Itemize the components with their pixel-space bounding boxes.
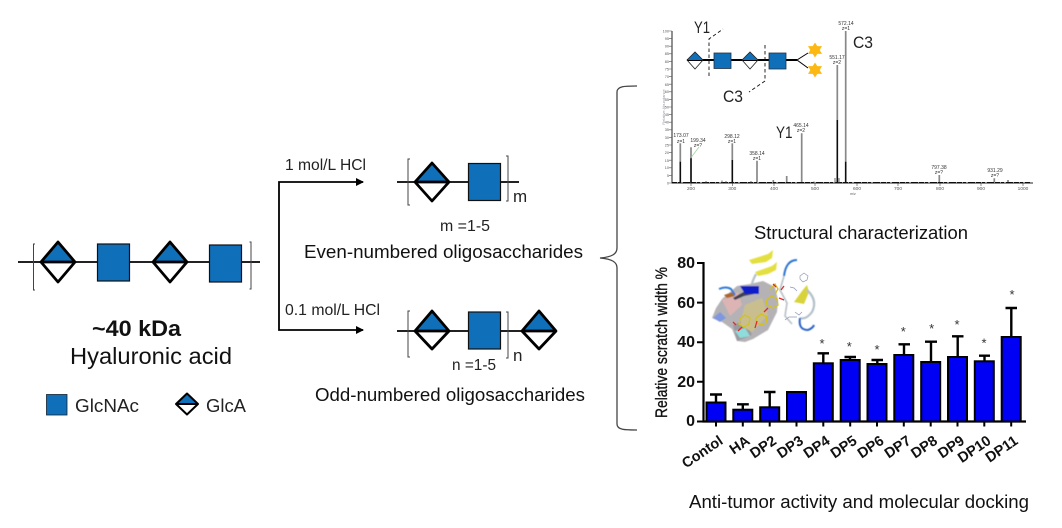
spectrum axes: 45 — [665, 113, 669, 117]
spectrum axes: 60 — [665, 90, 669, 94]
peak labels: z=2 — [797, 128, 805, 134]
peak labels: 551.17 — [829, 55, 845, 61]
x axis labels: Contol — [679, 433, 726, 472]
spectrum axes: 20 — [665, 151, 669, 155]
peak labels: z=1 — [728, 139, 736, 145]
spectrum axes: 50 — [665, 106, 669, 110]
peak labels: 298.12 — [724, 134, 740, 140]
x axis labels: HA — [727, 433, 754, 458]
spectrum axes: 10 — [665, 166, 669, 170]
branching reaction arrows — [279, 178, 364, 334]
y axis title: Relative scratch width % — [652, 267, 671, 418]
spectrum axes: 85 — [665, 52, 669, 56]
fragmentation glycan inset — [687, 29, 822, 92]
peak labels: 465.14 — [793, 123, 809, 129]
hyaluronic acid label: Hyaluronic acid — [70, 343, 232, 369]
spectrum axes: 75 — [665, 68, 669, 72]
fragment label: C3 peak: C3 — [853, 34, 873, 52]
fragment label: Y1 top: Y1 — [694, 19, 710, 37]
peak labels — [673, 21, 1003, 179]
odd-numbered oligosaccharide structure: n — [513, 346, 522, 365]
spectrum peaks — [672, 31, 1030, 183]
spectrum axes: 65 — [665, 83, 669, 87]
fragment label: Y1 peak: Y1 — [776, 124, 792, 142]
caption: anti-tumor activity and molecular docking: Anti-tumor activity and molecular docking — [689, 491, 1029, 512]
spectrum axes: 600 — [853, 186, 861, 192]
peak labels: z=? — [694, 143, 702, 149]
curly brace — [600, 86, 637, 430]
y axis: 80 — [677, 255, 695, 272]
legend: GlcNAc — [46, 394, 139, 416]
spectrum axes: Relative Abundance — [661, 88, 666, 125]
panel: bar chart — [652, 250, 1026, 472]
label: 0.1 mol/L HCl: 0.1 mol/L HCl — [285, 302, 380, 319]
panel: hyaluronic acid — [18, 242, 260, 416]
peak labels: 358.14 — [749, 151, 765, 157]
spectrum axes: 70 — [665, 75, 669, 79]
spectrum axes: 55 — [665, 98, 669, 102]
label: n range: n =1-5 — [452, 357, 496, 374]
y axis: 40 — [677, 334, 695, 351]
significance asterisks — [819, 287, 1015, 357]
spectrum axes: 800 — [936, 186, 944, 192]
x axis labels: DP2 — [747, 433, 780, 462]
even-numbered oligosaccharide structure — [397, 156, 527, 206]
x axis labels: DP11 — [983, 433, 1021, 466]
significance asterisks: * — [874, 342, 880, 357]
x axis labels — [679, 433, 1021, 472]
spectrum axes: 500 — [811, 186, 819, 192]
spectrum axes: 35 — [665, 128, 669, 132]
spectrum axes: 95 — [665, 37, 669, 41]
spectrum axes: 300 — [728, 186, 737, 192]
peak labels: 173.07 — [673, 133, 689, 139]
spectrum axes: m/z — [850, 192, 856, 196]
significance asterisks: * — [929, 321, 934, 336]
peak labels: 572.14 — [838, 21, 854, 27]
molecular docking illustration — [712, 250, 814, 342]
odd-numbered oligosaccharide structure — [397, 311, 556, 365]
fragment label: C3 lower: C3 — [723, 88, 743, 106]
peak labels: z=1 — [753, 156, 761, 162]
spectrum axes: 15 — [665, 159, 669, 163]
spectrum axes — [661, 30, 1033, 196]
caption: structural characterization: Structural characterization — [754, 222, 968, 243]
spectrum axes: 400 — [770, 186, 778, 192]
y axis: 0 — [686, 413, 695, 430]
molecular weight label: ~40 kDa — [92, 316, 181, 341]
heading: even-numbered oligosaccharides: Even-numbered oligosaccharides — [304, 241, 583, 262]
significance asterisks: * — [981, 336, 987, 350]
spectrum axes: 80 — [665, 60, 669, 64]
label: 1 mol/L HCl: 1 mol/L HCl — [285, 157, 366, 174]
spectrum axes: 5 — [667, 174, 669, 178]
spectrum axes: 90 — [665, 44, 669, 48]
x axis ticks — [716, 422, 1011, 426]
significance asterisks: * — [847, 339, 852, 354]
significance asterisks: * — [954, 317, 960, 332]
y axis: 20 — [677, 374, 695, 391]
spectrum axes: 200 — [687, 186, 695, 192]
heading: odd-numbered oligosaccharides: Odd-numbered oligosaccharides — [315, 384, 585, 405]
y axis: 60 — [677, 295, 695, 312]
spectrum axes: 40 — [665, 120, 669, 124]
even-numbered oligosaccharide structure: m — [513, 187, 527, 206]
significance asterisks: * — [901, 324, 906, 339]
label: m range: m =1-5 — [440, 218, 490, 235]
hyaluronic acid glycan chain — [18, 242, 260, 290]
legend: GlcNAc: GlcNAc — [75, 395, 139, 416]
spectrum axes: 25 — [665, 144, 669, 148]
peak labels: 931.29 — [987, 168, 1003, 174]
peak labels: z=1 — [677, 139, 685, 145]
bars — [706, 337, 1021, 422]
spectrum axes: 700 — [894, 186, 902, 192]
peak labels: 797.38 — [931, 165, 947, 171]
spectrum axes: 0 — [667, 182, 669, 186]
legend: GlcA: GlcA — [206, 395, 247, 416]
peak labels: z=? — [991, 173, 999, 179]
peak labels: z=1 — [842, 26, 850, 32]
spectrum axes: 1000 — [1018, 186, 1029, 192]
error bars — [710, 308, 1017, 410]
x axis labels: DP9 — [935, 433, 968, 462]
peak labels: 199.34 — [690, 138, 706, 144]
x axis labels: DP6 — [855, 433, 887, 462]
x axis labels: DP4 — [801, 433, 833, 462]
peak labels: z=? — [935, 170, 943, 176]
x axis labels: DP8 — [908, 433, 941, 462]
spectrum axes: 30 — [665, 136, 669, 140]
x axis labels: DP7 — [882, 433, 914, 462]
y axis — [677, 255, 1026, 430]
significance asterisks: * — [1009, 287, 1015, 302]
significance asterisks: * — [819, 336, 825, 351]
spectrum axes: 100 — [663, 30, 669, 34]
legend: GlcA — [176, 394, 247, 416]
panel: mass spectrum — [661, 19, 1033, 196]
x axis labels: DP10 — [955, 433, 994, 467]
x axis labels: DP3 — [774, 433, 807, 462]
peak labels: z=2 — [833, 60, 841, 66]
spectrum axes: 900 — [977, 186, 985, 192]
x axis labels: DP5 — [828, 433, 860, 462]
